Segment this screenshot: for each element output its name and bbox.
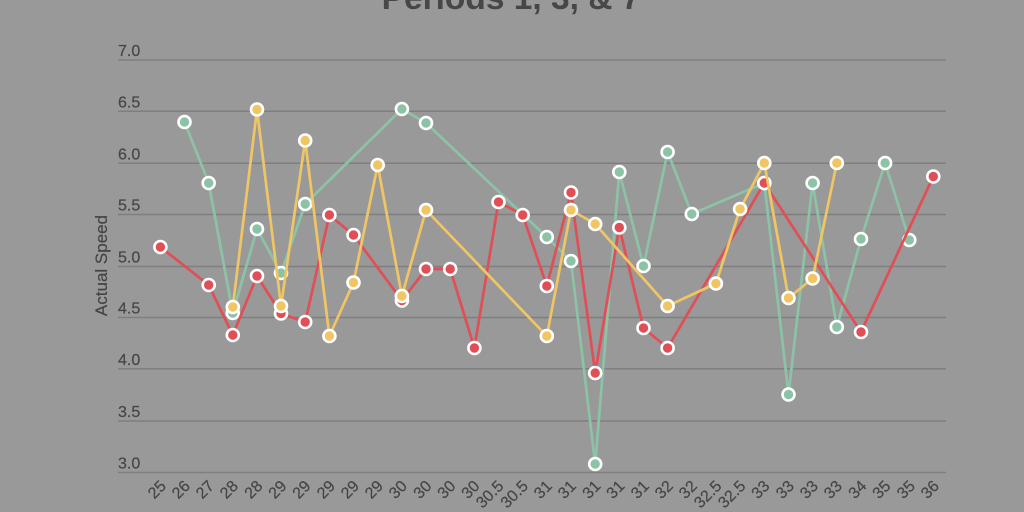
x axis labels: 33 bbox=[773, 478, 798, 502]
x axis labels: 29 bbox=[362, 478, 387, 502]
y axis title: Actual Speed bbox=[92, 215, 111, 316]
x axis labels: 31 bbox=[531, 478, 556, 502]
x axis labels: 25 bbox=[145, 478, 170, 502]
x axis labels: 31 bbox=[580, 478, 604, 502]
x axis labels: 34 bbox=[846, 478, 870, 502]
x axis labels: 30 bbox=[386, 478, 411, 502]
x axis labels: 32.5 bbox=[691, 478, 725, 512]
y axis gridlines and labels: 5.5 bbox=[118, 198, 140, 214]
x axis labels: 32 bbox=[676, 478, 701, 502]
x axis labels: 30.5 bbox=[473, 478, 507, 512]
y axis gridlines and labels: 3.5 bbox=[118, 404, 140, 421]
x axis labels: 29 bbox=[338, 478, 363, 502]
y axis gridlines and labels: 4.0 bbox=[118, 352, 140, 369]
x axis labels: 35 bbox=[894, 478, 919, 502]
x axis labels: 29 bbox=[314, 478, 339, 502]
y axis gridlines and labels: 7.0 bbox=[118, 43, 140, 60]
x axis labels: 32.5 bbox=[715, 478, 749, 512]
x axis labels: 29 bbox=[290, 478, 314, 502]
x axis labels: 27 bbox=[193, 478, 218, 502]
x axis labels: 30.5 bbox=[498, 478, 532, 512]
y axis gridlines and labels bbox=[118, 43, 946, 472]
series: red bbox=[154, 170, 939, 379]
y axis gridlines and labels: 5.0 bbox=[118, 250, 140, 266]
x axis labels: 31 bbox=[628, 478, 653, 502]
x axis labels: 36 bbox=[918, 478, 943, 502]
x axis labels: 28 bbox=[217, 478, 242, 502]
x axis labels: 32 bbox=[652, 478, 677, 502]
x axis labels: 33 bbox=[749, 478, 773, 502]
x axis labels: 30 bbox=[411, 478, 435, 502]
series: green bbox=[178, 103, 915, 470]
x axis labels: 28 bbox=[242, 478, 266, 502]
x axis labels: 33 bbox=[821, 478, 846, 502]
x axis labels bbox=[145, 478, 943, 512]
x axis labels: 31 bbox=[555, 478, 580, 502]
x axis labels: 29 bbox=[266, 478, 290, 502]
x axis labels: 26 bbox=[169, 478, 194, 502]
y axis gridlines and labels: 4.5 bbox=[118, 300, 140, 318]
y axis gridlines and labels: 3.0 bbox=[118, 456, 140, 472]
x axis labels: 30 bbox=[435, 478, 459, 502]
x axis labels: 31 bbox=[604, 478, 628, 502]
y axis gridlines and labels: 6.5 bbox=[118, 94, 140, 112]
y axis gridlines and labels: 6.0 bbox=[118, 146, 140, 164]
x axis labels: 35 bbox=[870, 478, 894, 502]
x axis labels: 30 bbox=[459, 478, 483, 502]
x axis labels: 33 bbox=[797, 478, 822, 502]
series: yellow bbox=[227, 104, 843, 342]
